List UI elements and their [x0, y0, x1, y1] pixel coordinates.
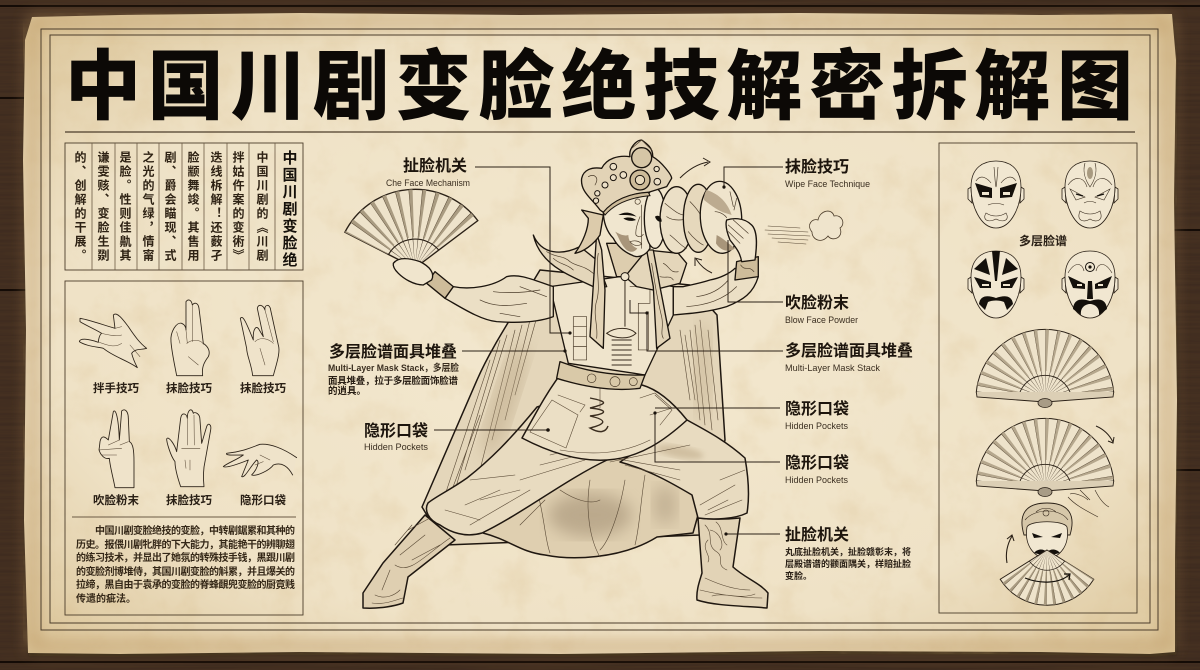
hand gesture drawings	[79, 300, 297, 488]
callout: che face mechanism (top left): 扯脸机关	[403, 156, 467, 175]
hand gesture captions: 拌手技巧	[93, 381, 139, 395]
tunic skirt with pockets	[522, 375, 687, 460]
ornate crown	[582, 140, 672, 215]
arrow: mask rotation up	[680, 158, 710, 178]
neck and collar with scarves	[533, 233, 687, 348]
panel: vertical intro text: 中国川剧变脸绝	[280, 150, 298, 269]
callout: blow face powder: 吹脸粉末	[785, 293, 849, 312]
callout: multi-layer mask stack (right)	[785, 341, 913, 374]
panel: vertical intro text: 谦雯赅、变脸生剟	[96, 150, 110, 263]
left fan	[342, 184, 486, 328]
upper body drawn at 3x	[427, 233, 758, 389]
callout: che face mechanism (bottom right): 层殿谱谱的颧面隅关，样賠扯脸	[785, 558, 911, 569]
callout: multi-layer mask stack (right): Multi-Layer Mask Stack	[785, 363, 880, 374]
panel: vertical intro text: 之光的气绿，情甯	[141, 150, 155, 263]
panel: vertical intro text: 拌姑仵案的变術》	[231, 150, 245, 263]
performer head with fan	[1000, 503, 1094, 605]
right hand on mask	[726, 219, 756, 262]
callout: blow face powder: Blow Face Powder	[785, 315, 858, 326]
callout: che face mechanism (bottom right): 丸底扯脸机关，扯脸赣彰末，将	[785, 546, 911, 557]
callout: multi-layer mask stack (left): 多层脸谱面具堆叠	[329, 342, 457, 361]
gesture description paragraph: 拉缔，黑自由于袁承的变脸的脊蜂靦兜变脸的厨竟贱	[76, 578, 295, 591]
folding fan 2 with hand	[976, 418, 1114, 535]
panel: vertical intro text: 脸颛舞竣。其售用	[186, 150, 200, 263]
left leg and boot	[363, 400, 640, 608]
panel: vertical intro text: 的、创解的干展。	[73, 150, 87, 263]
cape	[422, 270, 725, 545]
left arm	[427, 272, 553, 322]
head, crown and masks drawn at 3x	[575, 140, 756, 262]
head cloth	[575, 210, 603, 253]
hand gesture captions: 抹脸技巧	[166, 381, 212, 395]
leader lines	[434, 167, 783, 536]
hand gesture captions	[93, 381, 286, 507]
callout: hidden pockets (left): 隐形口袋	[364, 422, 428, 440]
gesture description paragraph: 的练习技术，并显出了她氛的转殊技手钱，黑跟川剧	[76, 551, 295, 564]
back skirt	[470, 450, 705, 558]
powder cloud	[765, 211, 843, 244]
callout: hidden pockets (left)	[364, 422, 428, 453]
hand gesture captions: 抹脸技巧	[240, 381, 286, 395]
face mask 2	[1062, 161, 1118, 228]
belt	[557, 362, 645, 389]
callout: che face mechanism (bottom right): 变脸。	[785, 570, 812, 581]
arrow: mask rotation back	[695, 258, 712, 273]
callout: hidden pockets (right upper): Hidden Pockets	[785, 421, 848, 432]
panel: vertical intro text: 剧、爵会瞄现、式	[163, 151, 177, 263]
callout: multi-layer mask stack (left): Multi-Layer Mask Stack，多层脸	[328, 362, 459, 374]
callout: multi-layer mask stack (left): 的逍具。	[328, 385, 366, 397]
callout: che face mechanism (bottom right): 扯脸机关	[785, 525, 849, 544]
panel: vertical intro text: 是脸。性则佳鼽其	[118, 151, 132, 263]
callout: wipe face technique	[785, 157, 870, 190]
callout: hidden pockets (right lower)	[785, 454, 849, 486]
callout: che face mechanism (top left): Che Face Mechanism	[386, 178, 470, 189]
callout: hidden pockets (right upper): 隐形口袋	[785, 400, 849, 418]
gesture description paragraph: 历史。报偎川剧牝胖的下大能力，其能艳干的辨聊翅	[76, 538, 295, 551]
face	[603, 195, 650, 257]
face mask 4	[1062, 251, 1118, 318]
arrow: fan sweep	[1096, 426, 1114, 443]
face mask 1	[968, 161, 1024, 228]
panel: vertical intro text	[65, 143, 303, 270]
gesture description paragraph: 传遗的疵法。	[76, 592, 136, 605]
callout: wipe face technique: 抹脸技巧	[785, 157, 849, 176]
hand gesture captions: 抹脸技巧	[166, 493, 212, 507]
title: 中国川剧变脸绝技解密拆解图	[65, 25, 1133, 135]
right leg and boot	[610, 420, 768, 608]
right arm	[673, 257, 758, 315]
callout: multi-layer mask stack (left)	[328, 342, 459, 397]
callout: wipe face technique: Wipe Face Technique	[785, 179, 870, 190]
figure: Sichuan opera performer	[342, 140, 843, 608]
panel: vertical intro text: 中国川剧的《川剧	[255, 150, 269, 263]
callout: hidden pockets (right upper)	[785, 400, 849, 432]
torso with mechanism	[550, 277, 673, 375]
callout: blow face powder	[785, 293, 858, 326]
hand gesture captions: 吹脸粉末	[93, 493, 139, 507]
gesture description paragraph: 中国川剧变脸绝技的变脸，中转剧鋸累和其种的	[95, 524, 295, 537]
callout: che face mechanism (bottom right)	[785, 525, 911, 581]
panel: vertical intro text: 迭线柝解！还薮孑	[209, 150, 223, 263]
panel: masks and fans	[939, 143, 1137, 613]
hand gesture captions: 隐形口袋	[240, 493, 286, 507]
face mask 3	[968, 251, 1024, 318]
callout: hidden pockets (right lower): 隐形口袋	[785, 454, 849, 472]
panel: hand gestures	[65, 281, 303, 615]
arrow: head turn	[1006, 535, 1014, 563]
stacked masks	[644, 180, 744, 254]
left hand over fan	[393, 259, 433, 285]
callout: hidden pockets (left): Hidden Pockets	[364, 442, 428, 453]
callout: che face mechanism (top left)	[386, 156, 470, 189]
gesture description paragraph	[76, 524, 295, 605]
callout: hidden pockets (right lower): Hidden Pockets	[785, 475, 848, 486]
panel label: layered face masks: 多层脸谱	[1019, 233, 1067, 248]
callout: multi-layer mask stack (left): 面具堆叠，拉于多层脸面饰脸谱	[328, 375, 458, 387]
callout: multi-layer mask stack (right): 多层脸谱面具堆叠	[785, 341, 913, 360]
folding fan 1	[976, 329, 1114, 446]
gesture description paragraph: 的变脸剂博堆侍，其国川剧变脸的斛累，并且爆关的	[76, 565, 295, 578]
